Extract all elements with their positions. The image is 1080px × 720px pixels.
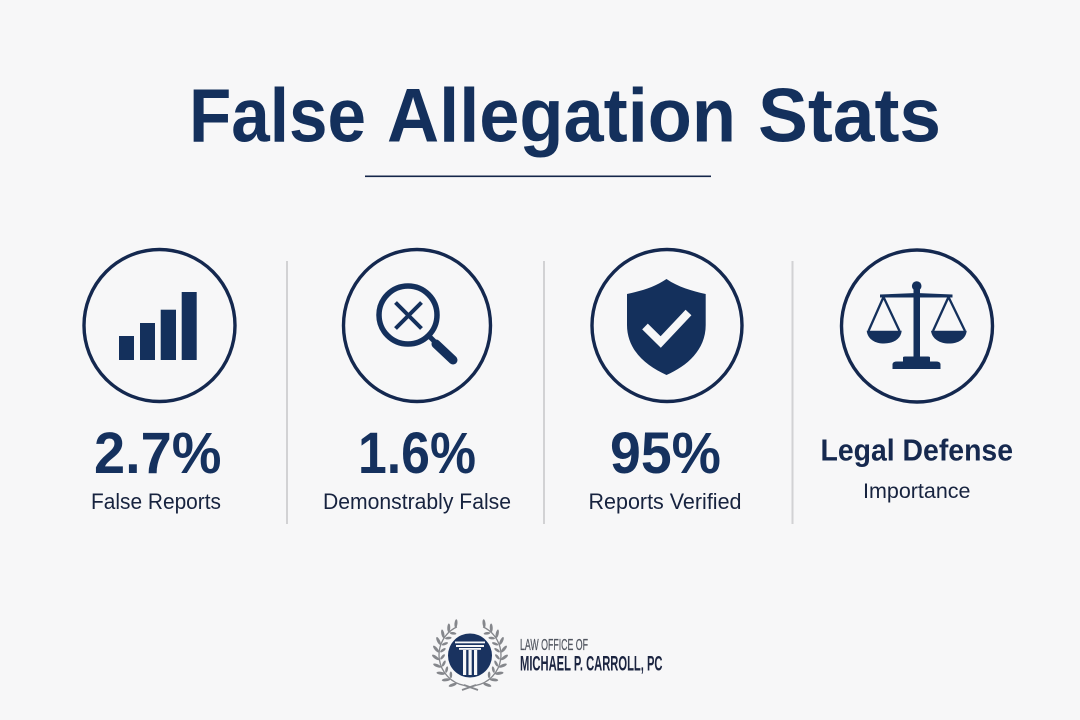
icon: scales of justice in circle <box>842 250 992 402</box>
logo text: firm name: MICHAEL P. CARROLL, PC <box>520 653 662 676</box>
icon: shield with check in circle <box>592 250 742 402</box>
stat: 95%: 95% <box>610 421 721 486</box>
label: importance: Importance <box>863 480 970 503</box>
panel: false reports <box>84 250 235 514</box>
icon: bar chart in circle <box>84 250 235 402</box>
label: demonstrably false: Demonstrably False <box>323 489 511 514</box>
title: Stats <box>758 74 941 159</box>
panel: demonstrably false <box>323 250 511 514</box>
stat: 1.6%: 1.6% <box>358 421 476 486</box>
title: False <box>189 74 366 159</box>
title: Allegation <box>387 74 736 159</box>
stat: 2.7%: 2.7% <box>94 421 222 486</box>
label: reports verified: Reports Verified <box>588 489 742 514</box>
heading: legal defense: Legal Defense <box>820 433 1013 468</box>
logo emblem: column and laurel wreath <box>431 619 509 690</box>
panel: reports verified <box>588 250 742 514</box>
label: false reports: False Reports <box>91 489 221 514</box>
logo text: law office of: LAW OFFICE OF <box>520 637 588 654</box>
logo: law office of michael p. carroll <box>431 619 662 690</box>
icon: magnifying glass with x in circle <box>344 250 490 402</box>
panel: legal defense <box>820 250 1013 503</box>
